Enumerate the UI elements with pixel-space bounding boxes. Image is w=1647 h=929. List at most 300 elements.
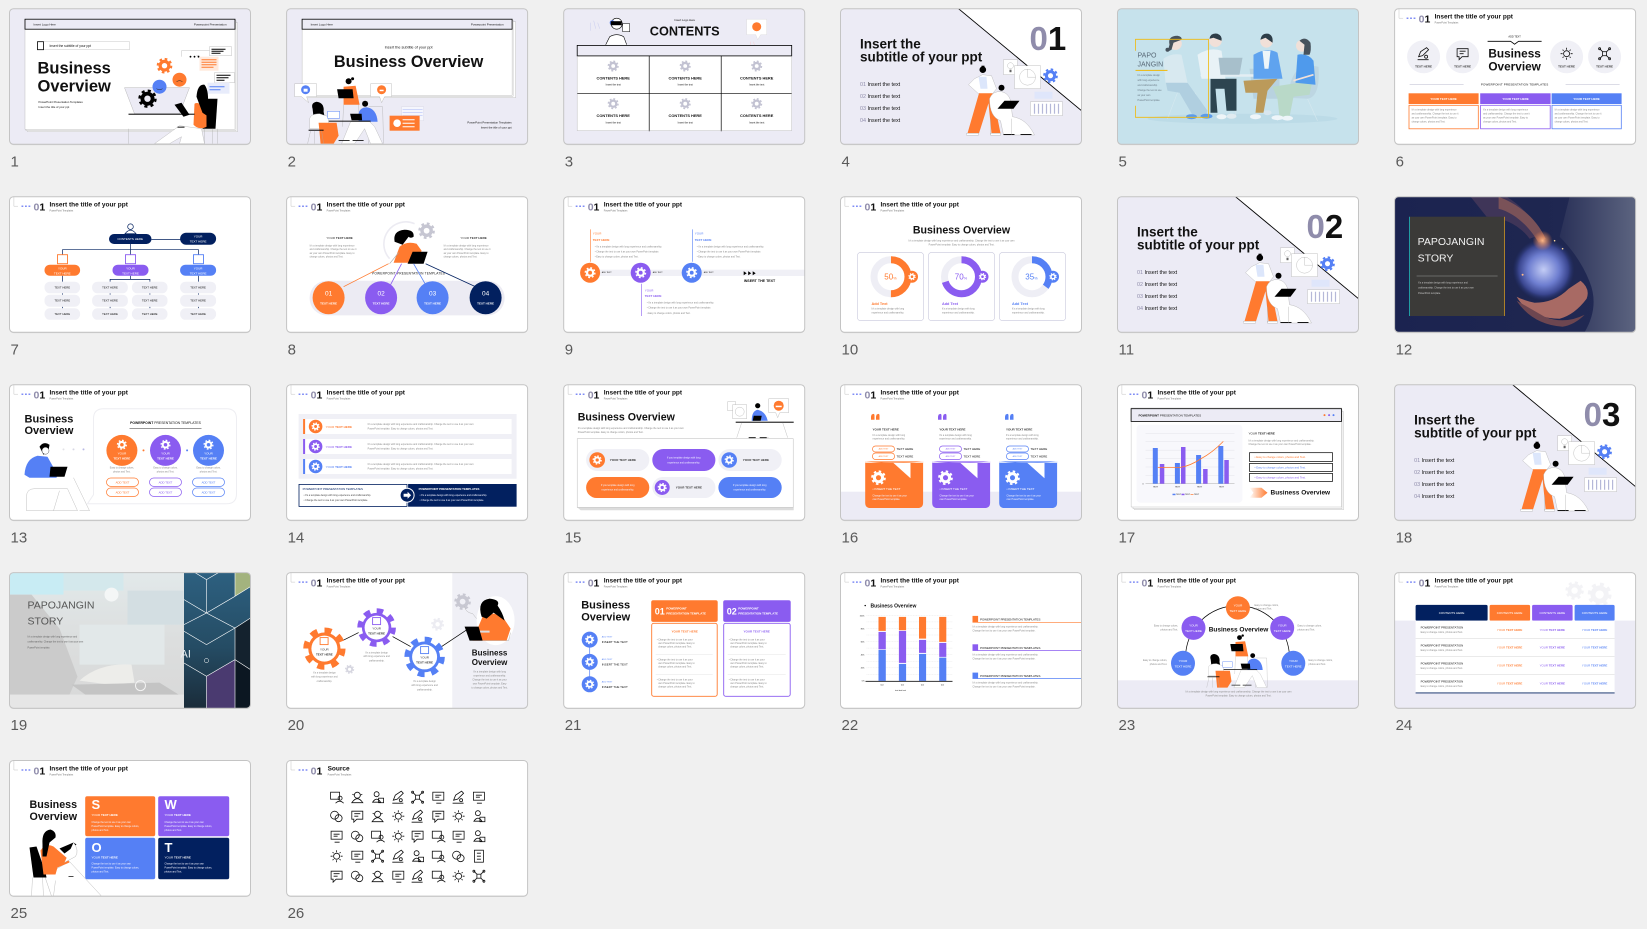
right comparison box: • It's a template design with long experience and craftsmanship. bbox=[420, 494, 487, 497]
column 02 bbox=[723, 600, 791, 696]
icon circles: TEXT HERE bbox=[1454, 65, 1471, 69]
milestone blue: • Easy to change colors, photos and Text. bbox=[697, 256, 741, 259]
contents cell 03 bbox=[740, 61, 774, 87]
milestone blue: • It's a template design with long experience and craftsmanship. bbox=[697, 246, 764, 249]
contents cell 02: Insert the text bbox=[678, 84, 693, 87]
node purple bbox=[112, 255, 148, 276]
right text block: YOUR TEXT HERE bbox=[460, 236, 487, 240]
contents cell 05: Insert the text bbox=[678, 122, 693, 125]
panel text: own PowerPoint template. Easy bbox=[473, 682, 507, 685]
pill: orange text: experience and craftsmanship. bbox=[601, 489, 634, 492]
slide 21: numbered columns bbox=[564, 573, 805, 709]
slide 5: 3D team photo bbox=[1118, 9, 1358, 145]
column 02: PRESENTATION TEMPLATE bbox=[738, 612, 778, 616]
card 50% bbox=[858, 252, 924, 321]
slide number 24: 24 bbox=[1396, 717, 1412, 734]
gear orange: TEXT HERE bbox=[316, 653, 333, 657]
column orange bbox=[865, 414, 923, 508]
center heading: Business bbox=[1488, 46, 1541, 60]
column blue: change colors, photos and Text. bbox=[1555, 121, 1589, 124]
pill: purple icon bbox=[652, 477, 715, 498]
column purple: experience and craftsmanship. bbox=[939, 438, 972, 441]
speech bubble bbox=[747, 19, 767, 48]
contents cell 04: CONTENTS HERE bbox=[597, 113, 630, 118]
table rows: POWERPOINT PRESENTATION bbox=[1421, 643, 1463, 647]
arc connector bbox=[1186, 606, 1290, 658]
header: PowerPoint Templates bbox=[50, 210, 74, 213]
illustration: team bbox=[1207, 634, 1268, 688]
subtitle box bbox=[38, 42, 130, 50]
header: Source bbox=[328, 766, 350, 772]
column purple: TEXT HERE bbox=[157, 457, 174, 461]
outlined list: • Easy to change colors, photos and Text. bbox=[1254, 465, 1306, 469]
left text block: It's a template design with long experience bbox=[310, 245, 355, 248]
milestone orange: • It's a template design with long experience and craftsmanship. bbox=[595, 246, 662, 249]
column purple: ADD TEXT bbox=[946, 455, 956, 458]
header: Insert the title of your ppt bbox=[880, 578, 960, 585]
pill: purple icon: YOUR TEXT HERE bbox=[676, 486, 702, 490]
table rows: YOUR TEXT HERE bbox=[1497, 628, 1522, 632]
contents cell 06 bbox=[740, 99, 774, 125]
icon circles: TEXT HERE bbox=[1596, 65, 1613, 69]
table rows: Easy to change colors, photos and Text. bbox=[1421, 631, 1463, 634]
circle 04 bbox=[470, 281, 502, 314]
column orange: TEXT HERE bbox=[896, 455, 913, 459]
contents cell 05 bbox=[669, 99, 702, 125]
header: 01 bbox=[1142, 390, 1153, 402]
slide 2: cover with team bbox=[287, 9, 528, 145]
header: 01 bbox=[588, 202, 600, 214]
SWOT W bbox=[158, 796, 229, 836]
title: Business bbox=[38, 60, 111, 78]
right text block: and craftsmanship. Change the text to use it bbox=[444, 248, 491, 251]
right comparison box: • Change the text to use it as your own PowerPoint template. bbox=[420, 499, 484, 502]
header bbox=[1398, 9, 1513, 24]
panel divider bbox=[1417, 275, 1498, 277]
slide 26: source icons bbox=[287, 760, 528, 897]
slide 1: cover with frame bbox=[10, 9, 250, 145]
section title: Insert the bbox=[860, 36, 921, 51]
slide 12: dark story photo bbox=[1395, 197, 1636, 333]
milestone orange: • Change the text to use it as your own PowerPoint template. bbox=[595, 251, 659, 254]
illustration: four seated people bbox=[1148, 34, 1338, 124]
milestone blue: • Change the text to use it as your own PowerPoint template. bbox=[697, 251, 761, 254]
slide number 19: 19 bbox=[10, 717, 27, 734]
blue icon list: INSERT THE TEXT bbox=[602, 663, 628, 667]
slide number 6: 6 bbox=[1396, 153, 1404, 170]
node blue: YOUR bbox=[194, 267, 202, 271]
header: 01 bbox=[1419, 14, 1430, 26]
column orange bbox=[1409, 93, 1479, 129]
section list: 04 Insert the text bbox=[1414, 494, 1455, 500]
column purple: TEXT HERE bbox=[964, 447, 980, 451]
column 02: own PowerPoint template. Easy to bbox=[730, 662, 767, 665]
subtitle text: Insert the title of your ppt bbox=[38, 105, 70, 109]
header bbox=[845, 197, 960, 214]
heading: Insert Logo Here bbox=[674, 18, 696, 22]
stacked bar chart: 60% bbox=[861, 642, 865, 644]
column orange: YOUR bbox=[118, 452, 126, 456]
card 70%: experience and craftsmanship. bbox=[942, 312, 975, 315]
circle 04: TEXT HERE bbox=[477, 302, 494, 306]
contents cell 03: Insert the text bbox=[749, 84, 765, 87]
title: Overview bbox=[30, 811, 78, 823]
milestone orange bbox=[580, 229, 662, 283]
story text: PowerPoint template. bbox=[28, 647, 51, 650]
section title: Insert the bbox=[1137, 224, 1198, 239]
column purple bbox=[932, 414, 990, 508]
milestone orange: YOUR bbox=[593, 232, 601, 236]
column orange: ADD TEXT bbox=[116, 490, 130, 494]
side panel bbox=[452, 573, 528, 708]
leaf pills: TEXT HERE bbox=[142, 312, 158, 316]
leaf pills: TEXT HERE bbox=[102, 286, 118, 290]
section number: 01 bbox=[1030, 20, 1066, 57]
column 02: own PowerPoint template. Easy to bbox=[730, 682, 767, 685]
card 50%: 50% bbox=[884, 273, 897, 282]
card 70%: 70% bbox=[955, 273, 968, 282]
table header: CONTENTS HERE bbox=[1539, 611, 1565, 615]
leaf pills: TEXT HERE bbox=[190, 312, 206, 316]
section list bbox=[860, 82, 901, 124]
column 01: PRESENTATION TEMPLATE bbox=[666, 612, 706, 616]
circle 02: 02 bbox=[377, 291, 385, 298]
slide 22: stacked bar chart bbox=[840, 573, 1082, 709]
illustration: man with laptop bbox=[24, 443, 90, 511]
circle 02 bbox=[365, 281, 397, 314]
pill: blue text: experience and craftsmanship. bbox=[733, 489, 766, 492]
header bbox=[568, 197, 683, 214]
slide number 13: 13 bbox=[10, 529, 27, 546]
note purple bbox=[972, 644, 1082, 660]
header bar bbox=[302, 19, 512, 29]
slide 24: comparison table bbox=[1395, 573, 1636, 709]
slide 14: rows and comparison bbox=[287, 385, 528, 521]
note blue bbox=[972, 673, 1082, 689]
circle right purple bbox=[1270, 616, 1322, 640]
header: 01 bbox=[1142, 578, 1153, 590]
title: Business bbox=[24, 413, 73, 425]
node: your text: TEXT HERE bbox=[190, 240, 206, 244]
slide number 8: 8 bbox=[288, 341, 296, 358]
column blue bbox=[192, 435, 224, 496]
header: Insert the title of your ppt bbox=[50, 390, 129, 397]
header: PowerPoint Templates bbox=[880, 210, 905, 213]
header: 01 bbox=[864, 202, 876, 214]
story title: STORY bbox=[1418, 253, 1453, 265]
row orange: PowerPoint template. Easy to change colors, photos and Text. bbox=[368, 428, 434, 431]
header bbox=[845, 385, 960, 402]
column orange: ADD TEXT bbox=[116, 480, 130, 484]
pill: orange icon: YOUR TEXT HERE bbox=[610, 458, 636, 462]
column orange: experience and craftsmanship. bbox=[872, 438, 905, 441]
column 02: • Change the text to use it as your bbox=[729, 659, 765, 662]
column 02: • Change the text to use it as your bbox=[729, 679, 765, 682]
column 02: own PowerPoint template. Easy to bbox=[730, 642, 767, 645]
row blue: PowerPoint template. Easy to change colors, photos and Text. bbox=[368, 468, 434, 471]
header bbox=[14, 197, 129, 214]
illustration: woman with tablet bbox=[30, 830, 102, 896]
blue icon list: ADD TEXT bbox=[602, 636, 613, 639]
table header bbox=[1416, 605, 1615, 621]
SWOT S: Change the text to use it as your own bbox=[92, 821, 131, 824]
table rows bbox=[1416, 626, 1615, 693]
stacked bar chart: text bbox=[880, 684, 884, 687]
column orange: YOUR TEXT HERE bbox=[1430, 97, 1457, 101]
gear orange: YOUR bbox=[320, 648, 329, 652]
circle 03: TEXT HERE bbox=[424, 302, 441, 306]
decorative gears bbox=[1567, 583, 1610, 605]
stacked bar chart: 100% bbox=[860, 616, 865, 618]
slide number 9: 9 bbox=[565, 341, 573, 358]
slide 3: contents bbox=[564, 9, 805, 145]
table rows: YOUR TEXT HERE bbox=[1582, 646, 1607, 650]
column blue: as your own PowerPoint template. Easy to bbox=[1555, 117, 1600, 120]
SWOT T: PowerPoint template. Easy to change colors, bbox=[164, 866, 212, 870]
column blue: ADD TEXT bbox=[202, 480, 216, 484]
circle 04: 04 bbox=[482, 291, 490, 298]
section list: 03 Insert the text bbox=[860, 106, 901, 112]
decorative small gears bbox=[346, 619, 443, 673]
column blue: YOUR TEXT HERE bbox=[1006, 428, 1032, 432]
slide number 21: 21 bbox=[565, 717, 581, 734]
circle top orange bbox=[1226, 596, 1279, 620]
left text block: and craftsmanship. Change the text to use it bbox=[310, 248, 357, 251]
header: 01 bbox=[34, 202, 45, 214]
circle left purple bbox=[1154, 616, 1206, 640]
slide 17: bar chart in frame bbox=[1118, 385, 1358, 521]
table rows: YOUR TEXT HERE bbox=[1497, 646, 1522, 650]
leaf pills: TEXT HERE bbox=[54, 299, 70, 303]
column blue: ADD TEXT bbox=[202, 490, 216, 494]
left text block bbox=[310, 236, 357, 259]
table rows: YOUR TEXT HERE bbox=[1582, 664, 1607, 668]
circle left purple: TEXT HERE bbox=[1185, 629, 1202, 633]
table rows: POWERPOINT PRESENTATION bbox=[1421, 679, 1463, 683]
column 01: • Change the text to use it as your bbox=[657, 679, 693, 682]
header: PowerPoint Templates bbox=[1158, 586, 1182, 589]
gear purple bbox=[360, 611, 393, 662]
story title: STORY bbox=[28, 615, 63, 627]
column purple: own PowerPoint template. bbox=[940, 498, 968, 501]
SWOT O: PowerPoint template. Easy to change colors, bbox=[92, 866, 139, 870]
chart: TEXT bbox=[1197, 487, 1203, 489]
header: Insert the title of your ppt bbox=[1158, 390, 1237, 397]
column purple: ADD TEXT bbox=[159, 490, 173, 494]
slide 2: cover with team: Insert Logo Here bbox=[311, 23, 333, 27]
circle right blue: Easy to change colors, bbox=[1308, 659, 1333, 662]
gear purple: It's a template design bbox=[365, 652, 388, 655]
gear blue bbox=[407, 639, 442, 691]
section list: 03 Insert the text bbox=[1137, 294, 1178, 300]
title: Business Overview bbox=[913, 224, 1011, 236]
subtitle: Insert the subtitle of your ppt bbox=[385, 46, 433, 50]
card 35%: Add Text bbox=[1012, 302, 1029, 306]
contents cell 02 bbox=[669, 61, 702, 87]
header: Insert the title of your ppt bbox=[327, 578, 406, 585]
panel text: experience and craftsmanship. bbox=[473, 674, 506, 677]
circle right blue: TEXT HERE bbox=[1285, 665, 1302, 669]
slide number 3: 3 bbox=[565, 153, 573, 170]
SWOT O: YOUR TEXT HERE bbox=[92, 856, 118, 860]
story text: PowerPoint template. bbox=[1138, 99, 1161, 102]
column orange: ADD TEXT bbox=[879, 455, 889, 458]
table rows: POWERPOINT PRESENTATION bbox=[1421, 661, 1463, 665]
header bbox=[568, 573, 683, 590]
slide number 12: 12 bbox=[1396, 341, 1412, 358]
icon grid bbox=[331, 791, 485, 882]
story text: craftsmanship. Change the text to use it as your own bbox=[1418, 286, 1474, 289]
column blue bbox=[999, 414, 1057, 508]
circle right blue: YOUR bbox=[1289, 659, 1298, 663]
header: Insert the title of your ppt bbox=[1435, 14, 1514, 21]
header bbox=[1122, 573, 1237, 590]
gear blue: YOUR bbox=[420, 656, 429, 660]
leaf pills: TEXT HERE bbox=[190, 299, 206, 303]
side paragraph: It's a template design with long experience and craftsmanship. bbox=[1248, 439, 1314, 442]
chart: TEXT bbox=[1176, 494, 1182, 496]
panel bbox=[577, 439, 793, 507]
column orange: own PowerPoint template. bbox=[872, 498, 901, 501]
caption: PowerPoint Presentation Templates bbox=[467, 120, 512, 124]
center heading bbox=[1488, 36, 1542, 74]
column 02: • Change the text to use it as your bbox=[729, 639, 765, 642]
SWOT O: Change the text to use it as your own bbox=[92, 862, 131, 866]
header: Insert the title of your ppt bbox=[50, 202, 129, 209]
header bbox=[14, 385, 129, 402]
slide 9: timeline bbox=[564, 197, 805, 333]
left comparison box bbox=[299, 484, 407, 506]
column purple: ADD TEXT bbox=[946, 448, 956, 451]
panel edges bbox=[1408, 217, 1410, 316]
story title: PAPOJANGIN bbox=[1418, 236, 1485, 248]
column 02: change colors, photos and Text. bbox=[730, 665, 764, 668]
table rows: YOUR TEXT HERE bbox=[1540, 664, 1565, 668]
column 01: own PowerPoint template. Easy to bbox=[658, 662, 695, 665]
column purple: YOUR bbox=[161, 452, 170, 456]
column blue: TEXT HERE bbox=[1030, 455, 1047, 459]
circle right purple: YOUR bbox=[1278, 624, 1287, 628]
column purple: YOUR TEXT HERE bbox=[1502, 97, 1529, 101]
stacked bar chart: 0% bbox=[862, 681, 865, 683]
slide 8: four circles with woman bbox=[287, 197, 528, 333]
card 70%: It's a template design with long bbox=[942, 308, 975, 311]
pill: orange icon bbox=[586, 449, 649, 471]
center label: POWERPOINT PRESENTATION TEMPLATES bbox=[372, 272, 445, 276]
column purple: • INSERT THE TEXT bbox=[940, 487, 968, 491]
node blue: TEXT HERE bbox=[190, 272, 206, 276]
end label bbox=[744, 271, 776, 283]
yellow accent bar bbox=[1136, 70, 1168, 71]
row purple bbox=[303, 439, 512, 454]
column orange: TEXT HERE bbox=[896, 447, 913, 451]
column purple bbox=[150, 435, 182, 496]
story text: craftsmanship. Change the text to use it as your own bbox=[28, 641, 84, 644]
story text: and craftsmanship. bbox=[1138, 84, 1158, 87]
slide number 2: 2 bbox=[288, 153, 296, 170]
subtitle text: It's a template design with long experience and craftsmanship. Change the text to use it as your own bbox=[578, 427, 684, 430]
SWOT T: Change the text to use it as your own bbox=[164, 862, 204, 866]
section list: 01 Insert the text bbox=[1137, 270, 1178, 276]
row orange bbox=[303, 419, 512, 434]
chart: TEXT bbox=[1153, 487, 1159, 489]
table header: CONTENTS HERE bbox=[1582, 611, 1607, 615]
table body bbox=[1416, 621, 1615, 693]
milestone purple bbox=[631, 263, 714, 316]
column blue: Easy to change colors, bbox=[196, 467, 221, 470]
blue icon list bbox=[582, 632, 628, 692]
slide 16: three quote cards bbox=[840, 385, 1082, 521]
circle right purple: TEXT HERE bbox=[1274, 629, 1291, 633]
row orange: It's a template design with long experience and craftsmanship. Change the text to use it as your own bbox=[368, 423, 474, 426]
title: Overview bbox=[581, 611, 631, 623]
column 01: own PowerPoint template. Easy to bbox=[658, 682, 695, 685]
icon: person bbox=[125, 224, 136, 234]
column purple: It's a template design with long experience bbox=[1483, 109, 1528, 112]
end label: INSERT THE TEXT bbox=[744, 279, 776, 283]
rows panel bbox=[299, 414, 517, 479]
section list: 02 Insert the text bbox=[860, 94, 901, 100]
section title: Insert the bbox=[1414, 412, 1475, 427]
circle right blue: photos and Text. bbox=[1308, 663, 1326, 666]
header bbox=[291, 197, 406, 214]
story text: PowerPoint template. bbox=[1418, 292, 1441, 295]
slide number 11: 11 bbox=[1118, 341, 1134, 358]
node: your text: YOUR bbox=[194, 235, 202, 239]
slide number 5: 5 bbox=[1118, 153, 1127, 170]
header: PowerPoint Templates bbox=[1435, 586, 1459, 589]
contents cell 05: CONTENTS HERE bbox=[669, 113, 702, 118]
circle left purple: photos and Text. bbox=[1160, 629, 1178, 632]
column 02: POWERPOINT bbox=[738, 607, 759, 611]
header: PowerPoint Templates bbox=[50, 774, 74, 776]
header: 01 bbox=[34, 390, 45, 402]
table rows: Easy to change colors, photos and Text. bbox=[1421, 685, 1463, 688]
circle left blue: photos and Text. bbox=[1150, 663, 1168, 666]
header: 01 bbox=[1419, 578, 1430, 590]
milestone orange: ADD TEXT bbox=[602, 271, 612, 274]
header: PowerPoint Templates bbox=[604, 398, 628, 401]
SWOT S: S bbox=[92, 797, 100, 812]
section title: subtitle of your ppt bbox=[1414, 426, 1537, 441]
arrow and label bbox=[1250, 488, 1331, 498]
slide 3: contents: CONTENTS bbox=[650, 25, 720, 39]
slide 1: cover with frame: Powerpoint Presentation bbox=[194, 23, 227, 27]
band bbox=[310, 281, 505, 315]
column 01: change colors, photos and Text. bbox=[658, 645, 692, 648]
column purple: TEXT HERE bbox=[964, 455, 980, 459]
leaf pills: TEXT HERE bbox=[190, 286, 206, 290]
title: Business Overview bbox=[578, 411, 676, 423]
slide 18: section 03 bbox=[1395, 385, 1636, 521]
SWOT O: O bbox=[92, 840, 102, 855]
timeline band bbox=[600, 270, 805, 276]
milestone purple: • Easy to change colors, photos and Text. bbox=[647, 312, 691, 315]
node orange bbox=[44, 255, 80, 276]
slide 10: three donut cards bbox=[840, 197, 1082, 333]
header bbox=[291, 385, 406, 402]
section list: 04 Insert the text bbox=[860, 118, 901, 124]
contents cell 06: CONTENTS HERE bbox=[740, 113, 774, 118]
SWOT T: YOUR TEXT HERE bbox=[164, 856, 191, 860]
panel edge right bbox=[1503, 217, 1505, 316]
circle left blue: YOUR bbox=[1179, 659, 1187, 663]
SWOT T: photos and Text. bbox=[164, 870, 182, 874]
card 35%: experience and craftsmanship. bbox=[1012, 312, 1045, 315]
panel title: Business bbox=[472, 649, 507, 658]
table rows: YOUR TEXT HERE bbox=[1582, 628, 1607, 632]
node: contents bbox=[109, 234, 152, 244]
